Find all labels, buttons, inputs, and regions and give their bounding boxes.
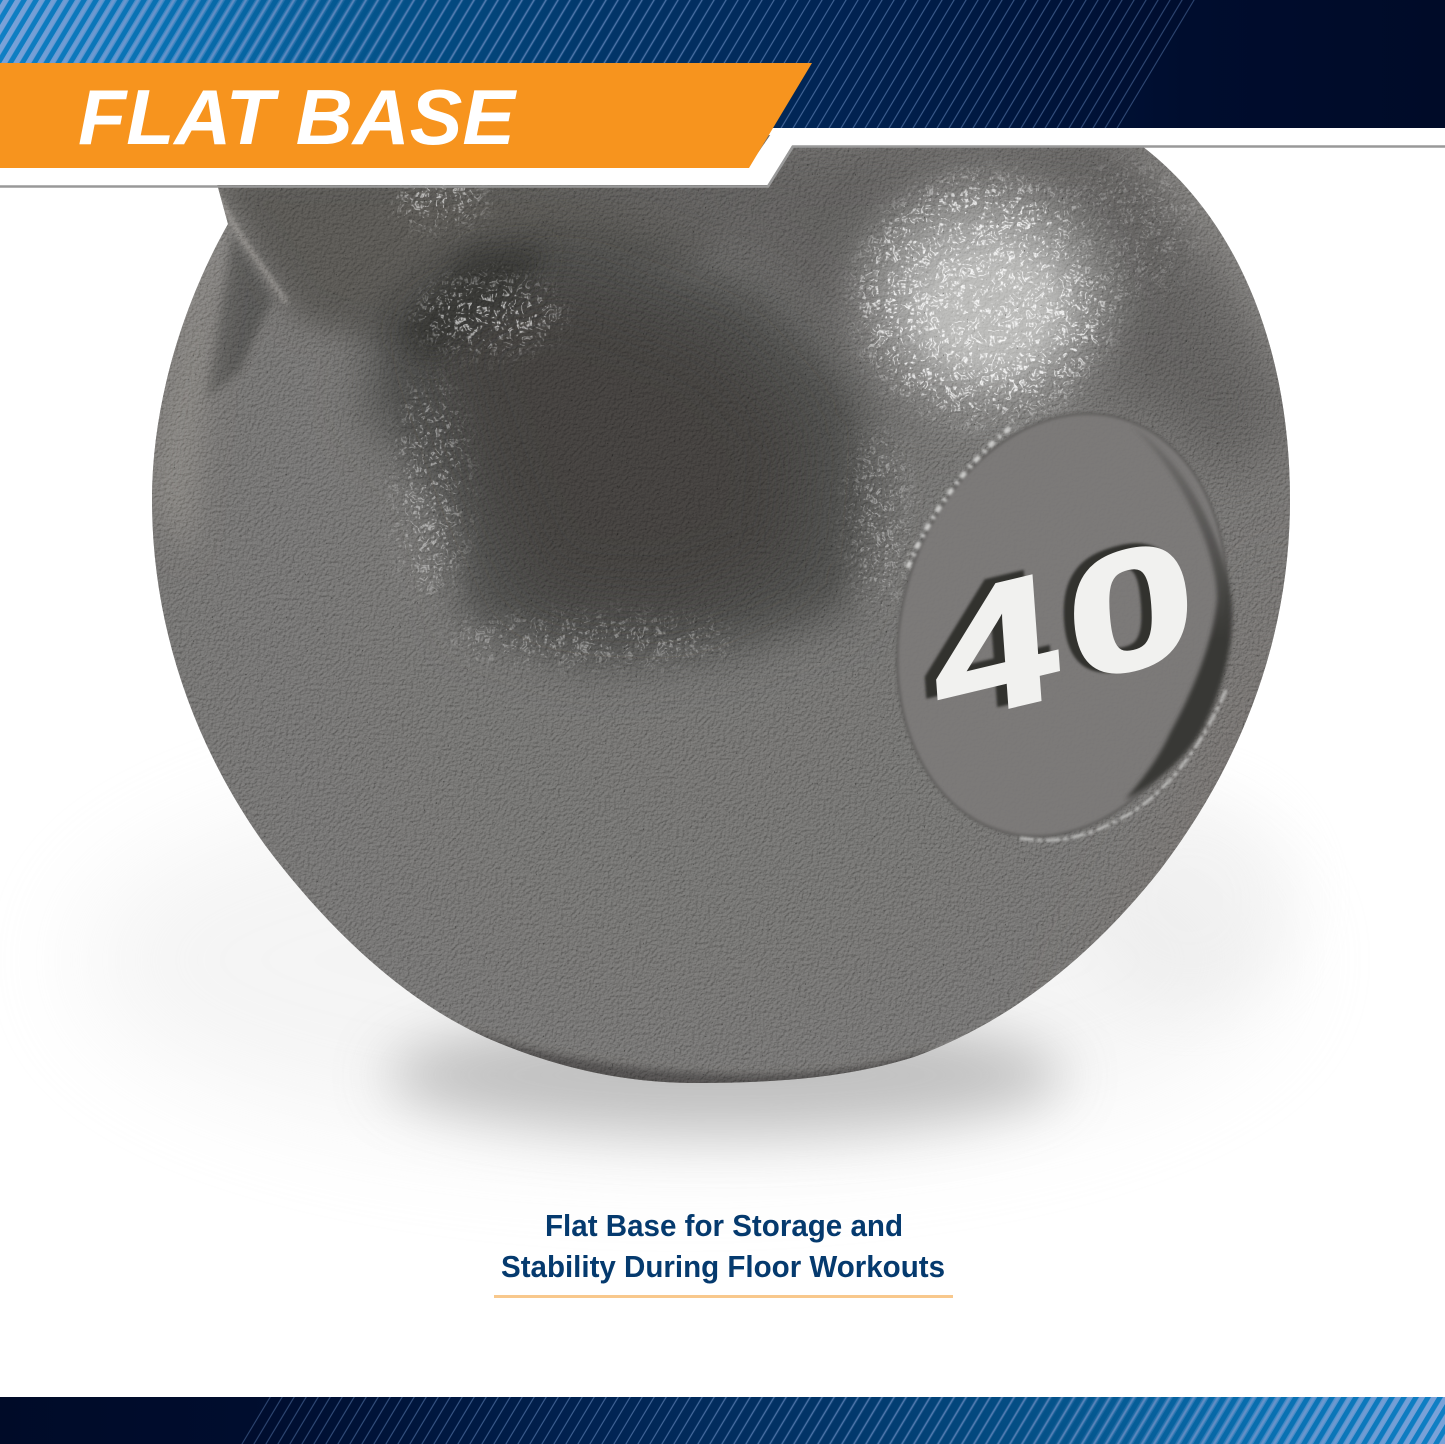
number 40 — [926, 502, 1201, 763]
number 40: 0 — [1060, 502, 1201, 719]
title: FLAT BASE — [78, 73, 517, 161]
disc rim ring — [849, 374, 1275, 876]
pebbled surface — [140, 130, 1300, 1090]
disc face — [898, 414, 1224, 835]
casting pits — [140, 130, 1300, 1090]
upper-left rim glints — [906, 428, 1010, 572]
number 40 emboss shadow: 0 — [1051, 500, 1192, 717]
dark reflection outer — [365, 230, 880, 665]
bottom band — [0, 1316, 1445, 1444]
grey chevron line — [0, 146, 1445, 186]
caption line 1: Flat Base for Storage and — [545, 1208, 903, 1243]
weight disc details — [895, 412, 1235, 844]
body base — [152, 132, 1290, 1083]
number 40 emboss shadow: 4 — [916, 531, 1054, 760]
caption line 2: Stability During Floor Workouts — [501, 1249, 945, 1284]
number 40: 4 — [926, 534, 1064, 763]
lower-right body tone — [1102, 622, 1277, 936]
floor shadow — [80, 770, 1300, 1150]
orange title banner — [0, 63, 812, 168]
base contact shadow — [472, 1029, 929, 1083]
white chevron strip — [0, 128, 1445, 185]
dark reflection core — [430, 280, 800, 610]
top header band — [0, 0, 1445, 128]
lower rim highlight — [1020, 690, 1226, 840]
handle crease — [213, 188, 287, 303]
caption underline — [494, 1295, 953, 1298]
bright highlight — [870, 192, 1100, 408]
left rim shading — [205, 235, 272, 400]
caption — [501, 1208, 945, 1284]
kettlebell body — [140, 130, 1300, 1090]
disc rim groove — [1125, 425, 1232, 800]
handle neck — [218, 185, 710, 346]
upper band shading — [645, 135, 1288, 478]
number 40 emboss shadow — [916, 500, 1192, 760]
body shading — [140, 130, 1300, 1090]
glossy hammered glints — [381, 152, 1206, 675]
